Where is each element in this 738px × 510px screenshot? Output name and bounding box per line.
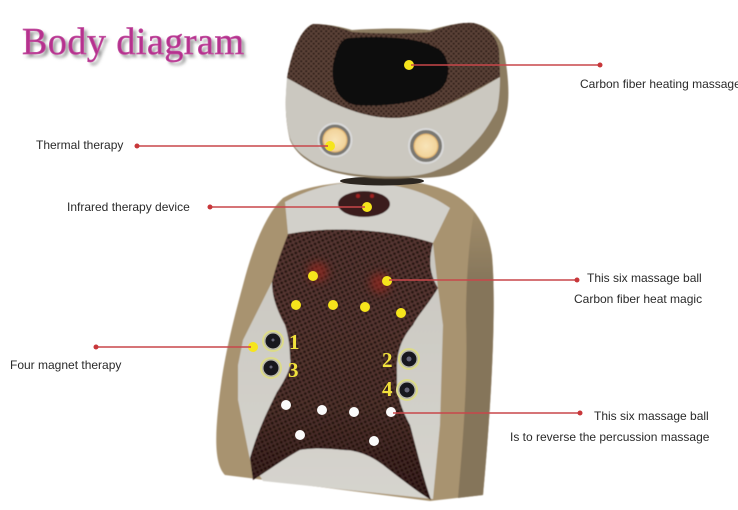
heat button right (409, 129, 443, 163)
headrest shell (286, 23, 508, 179)
callout labels: This six massage ball (587, 271, 702, 285)
magnet numbers: 3 (288, 358, 298, 382)
magnet nodes (261, 331, 419, 400)
mesh panel (250, 229, 438, 500)
title: Body diagram (25, 24, 247, 66)
heat glow (308, 262, 390, 293)
magnet numbers: 4 (382, 377, 393, 401)
cushion body (216, 180, 494, 501)
mesh lower shading (250, 325, 431, 500)
callout labels: This six massage ball (594, 409, 709, 423)
heat button left (318, 124, 352, 156)
mesh top (287, 23, 500, 118)
top grey panel (285, 183, 450, 243)
callout labels: Thermal therapy (36, 138, 123, 152)
grey front (286, 77, 500, 176)
back cushion (216, 180, 494, 501)
callout lines (94, 62, 602, 416)
callout labels (10, 77, 738, 444)
callout labels: Carbon fiber heating massage (580, 77, 738, 91)
black pad (333, 37, 448, 106)
right side shading (458, 212, 494, 498)
side grey panels (238, 234, 443, 499)
callout labels: Carbon fiber heat magic (574, 292, 702, 306)
title: Body diagram (22, 21, 244, 63)
white massage balls (281, 400, 396, 446)
yellow massage points (248, 60, 414, 352)
callout labels: Four magnet therapy (10, 358, 121, 372)
control panel (338, 191, 390, 217)
headrest (286, 23, 508, 179)
magnet numbers (288, 330, 393, 401)
neck shadow (340, 176, 424, 186)
magnet numbers: 2 (382, 348, 392, 372)
magnet numbers: 1 (289, 330, 300, 354)
callout labels: Is to reverse the percussion massage (510, 430, 710, 444)
callout labels: Infrared therapy device (67, 200, 190, 214)
